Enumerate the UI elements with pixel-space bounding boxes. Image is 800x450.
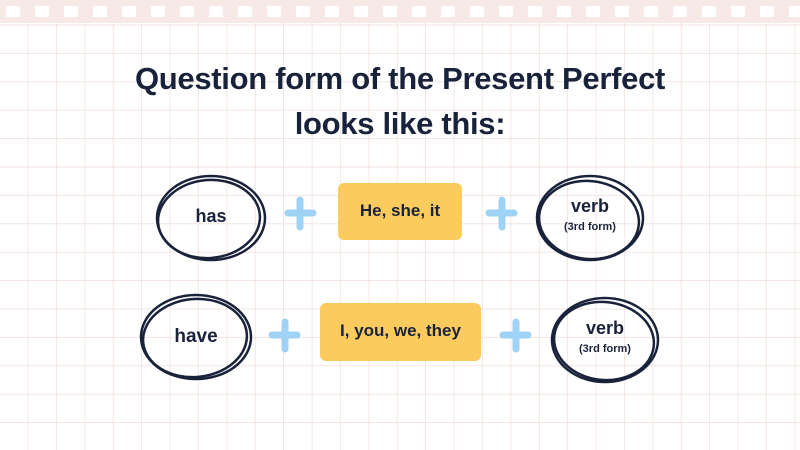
label He, she, it: He, she, it — [360, 201, 440, 220]
label I, you, we, they: I, you, we, they — [340, 321, 461, 340]
circle: verb 2 — [550, 297, 658, 385]
label verb 1: verb — [571, 196, 609, 216]
title: Question form of the Present Perfect — [135, 61, 665, 96]
plus 3 — [272, 322, 297, 349]
plus 1 — [288, 200, 313, 227]
circle: has — [155, 176, 265, 262]
title — [135, 61, 665, 141]
label verb 2: (3rd form) — [579, 343, 631, 355]
label verb 1: (3rd form) — [564, 221, 616, 233]
label verb 2: verb — [586, 318, 624, 338]
label verb 2 — [579, 318, 631, 355]
label have: have — [174, 326, 218, 347]
yellow box: I, you, we, they — [320, 303, 481, 361]
plus 2 — [489, 200, 514, 227]
yellow box: He, she, it — [338, 183, 462, 240]
title: looks like this: — [295, 106, 505, 141]
label verb 1 — [564, 196, 616, 233]
plus 4 — [503, 322, 528, 349]
top strip — [0, 0, 800, 23]
label has: has — [195, 206, 227, 226]
circle: verb 1 — [535, 176, 643, 264]
circle: have — [140, 295, 251, 381]
